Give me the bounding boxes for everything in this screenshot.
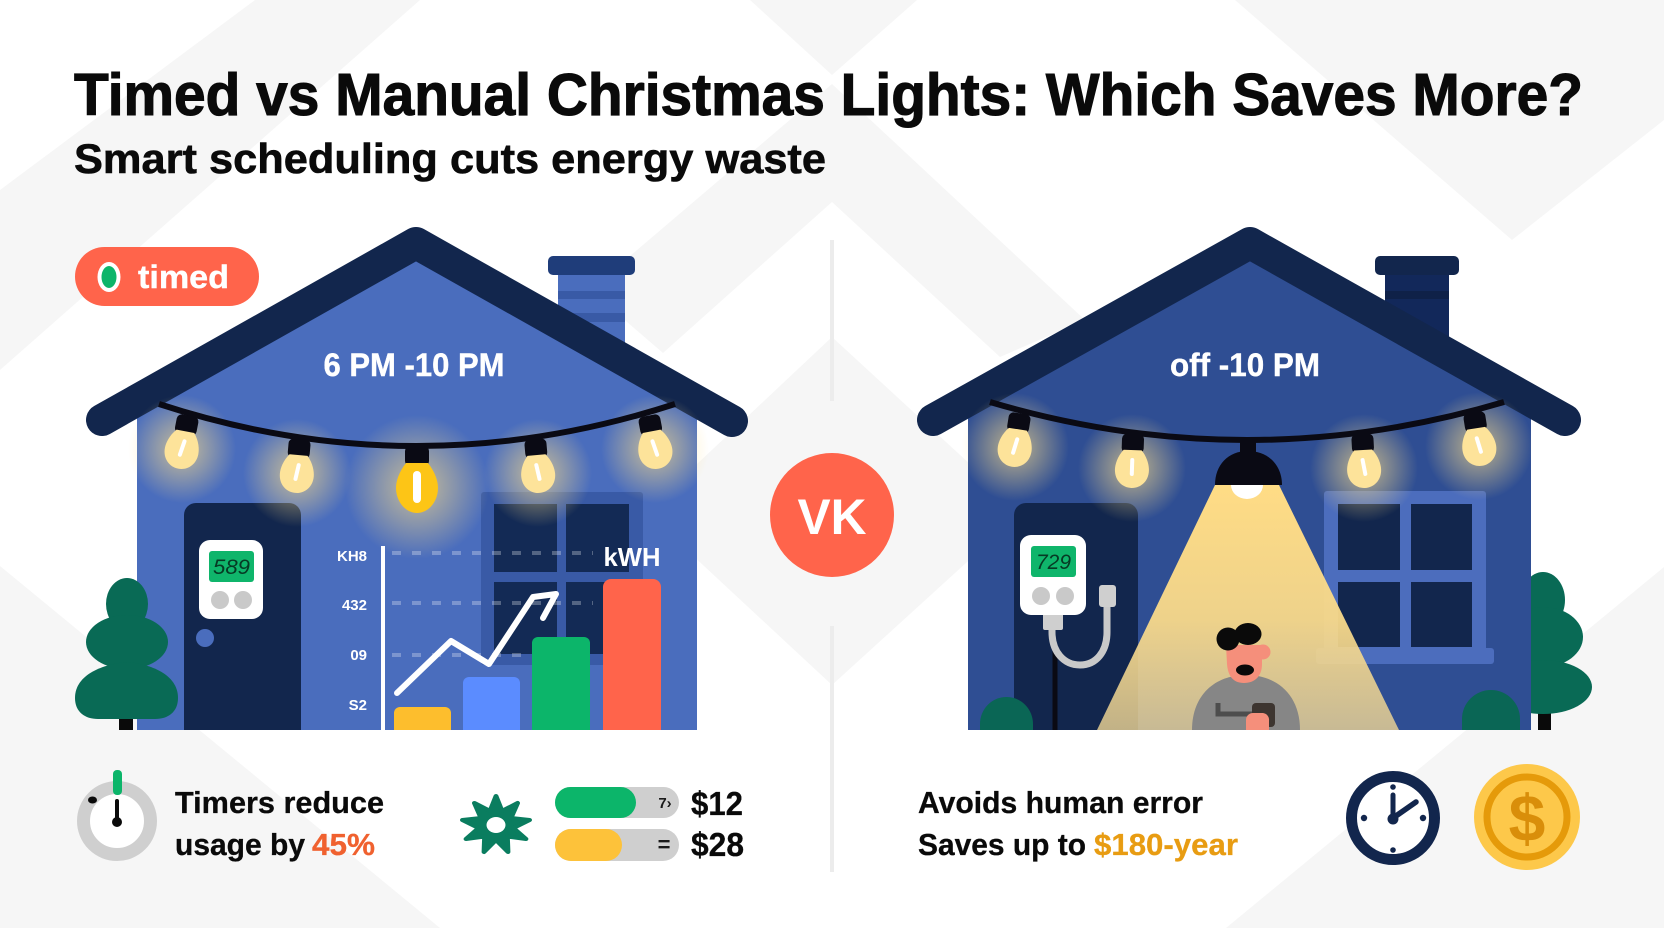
light glow	[961, 392, 1533, 522]
icon: timer	[84, 770, 150, 854]
text: usage by 45%	[175, 827, 375, 862]
schedule label: 6 PM -10 PM	[324, 347, 504, 383]
door	[184, 503, 301, 730]
divider	[830, 240, 834, 872]
text: usage by 45%: 45%	[312, 827, 375, 862]
badge: timed: timed	[138, 259, 229, 295]
bar chart: 09	[350, 647, 367, 664]
door	[1014, 503, 1138, 730]
chimney	[548, 256, 635, 380]
meter	[199, 540, 263, 619]
tree: right	[1494, 572, 1592, 730]
vs circle	[770, 453, 894, 577]
panel: manual house	[933, 243, 1592, 730]
chimney	[1375, 256, 1459, 380]
bar chart: KH8	[337, 548, 367, 565]
text: usage by 45%: usage by	[175, 827, 306, 862]
string wire	[990, 402, 1504, 440]
bar: timed cost: $12	[691, 785, 743, 822]
meter: 589	[213, 556, 250, 579]
stat: avoids human error: $180-year	[1094, 827, 1238, 862]
light beam	[1097, 485, 1399, 730]
title: Timed vs Manual Christmas Lights: Which Saves More?	[74, 62, 1583, 128]
bar chart: 432	[342, 597, 367, 614]
icon: dollar coin: $	[1509, 781, 1545, 855]
bulb 3	[1345, 433, 1382, 489]
stat: timers reduce usage	[84, 770, 384, 862]
badge: timed	[75, 247, 259, 306]
bulb 4	[518, 438, 557, 494]
meter with plug: 729	[1036, 551, 1071, 574]
string wire	[159, 404, 675, 446]
schedule label: off -10 PM	[1170, 347, 1320, 383]
window	[481, 492, 643, 665]
porch lamp	[1215, 440, 1282, 499]
stat: avoids human error: Saves up to	[918, 827, 1086, 862]
bulb 3	[396, 446, 438, 513]
bulb 1	[995, 411, 1037, 469]
icon: clock	[1352, 776, 1434, 860]
stat: avoids human error: Avoids human error	[918, 785, 1203, 820]
tree: left	[75, 578, 178, 730]
bar: timed cost: 7›	[658, 795, 672, 812]
bulb 4	[1457, 410, 1499, 468]
bar: manual cost: =	[658, 832, 670, 857]
text: timers reduce: Timers reduce	[175, 785, 384, 820]
bar: manual cost: $28	[691, 826, 744, 863]
cost comparison bars	[555, 785, 744, 863]
bar: timed cost	[555, 785, 743, 822]
window	[1316, 491, 1494, 664]
person	[1192, 623, 1300, 730]
bulb 2	[1114, 433, 1150, 489]
bar chart: kWH	[604, 542, 660, 572]
bulb 1	[161, 412, 205, 472]
bar: manual cost	[555, 826, 744, 863]
light glow	[128, 395, 709, 559]
bulb 5	[632, 412, 676, 472]
roof	[102, 243, 732, 421]
bar chart: S2	[349, 697, 367, 714]
icon: gear	[462, 796, 530, 852]
panel: timed house	[75, 243, 732, 731]
vs circle: VK	[798, 489, 866, 545]
stat: avoids human error	[918, 785, 1238, 862]
bushes	[980, 690, 1520, 730]
subtitle: Smart scheduling cuts energy waste	[74, 135, 826, 182]
bulb 2	[278, 438, 317, 494]
meter with plug	[1020, 535, 1116, 730]
house body	[968, 245, 1531, 730]
bar chart	[337, 542, 661, 731]
roof	[933, 243, 1565, 420]
house body	[137, 245, 697, 730]
icon: dollar coin	[1474, 764, 1580, 870]
